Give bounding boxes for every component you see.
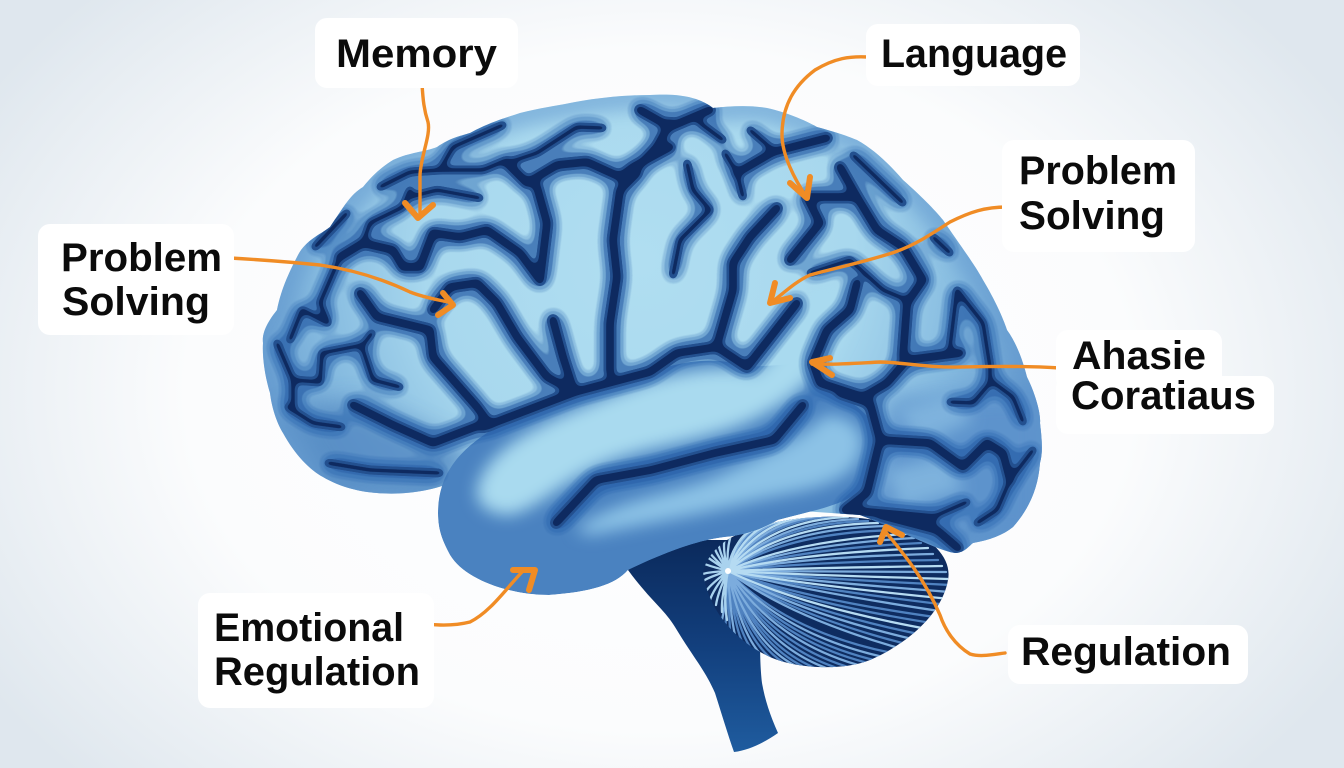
label: Memory [315,18,518,88]
temporal lobe base [438,361,879,595]
arrow: Problem Solving right [770,207,1007,303]
label: Problem Solving right: Problem [1019,149,1177,193]
brain stem [628,540,778,752]
label: Ahasie Coratiaus [1056,330,1274,434]
arrow: Emotional Regulation [412,570,535,625]
label: Emotional Regulation [198,593,434,708]
label: Problem Solving left [38,224,234,335]
label: Emotional Regulation: Emotional [214,606,404,650]
label: Ahasie Coratiaus: Ahasie [1072,334,1206,378]
label: Regulation: Regulation [1021,630,1231,674]
lower left lobe shading [280,400,470,500]
upper temporal gyrus highlight [468,361,812,524]
cerebrum and temporal lobe [263,95,1045,595]
lower temporal gyrus highlight [575,415,863,535]
arrow: Regulation [880,527,1005,656]
label: Problem Solving left: Problem [61,236,222,280]
fibre centre point [725,568,731,574]
cerebellum with radial fibres [702,516,950,668]
lower right lobe shading [870,390,1045,545]
label: Problem Solving left: Solving [62,280,210,324]
folds of the cortex [277,110,1033,548]
label: Regulation [1008,625,1248,684]
arrow: Memory [405,84,433,218]
label: Language [866,24,1080,86]
label: Problem Solving right: Solving [1019,194,1165,238]
arrow: Ahasie Coratiaus [812,358,1060,375]
label: Language: Language [881,32,1067,76]
arrow: Language [782,57,868,198]
outer edge shading [263,95,1042,553]
brain illustration [263,95,1045,752]
arrow: Problem Solving left [230,258,453,315]
label: Memory: Memory [336,32,498,76]
label: Emotional Regulation: Regulation [214,650,420,694]
label: Problem Solving right [1002,140,1195,252]
lobe highlights [898,396,973,437]
label: Ahasie Coratiaus: Coratiaus [1071,374,1256,418]
